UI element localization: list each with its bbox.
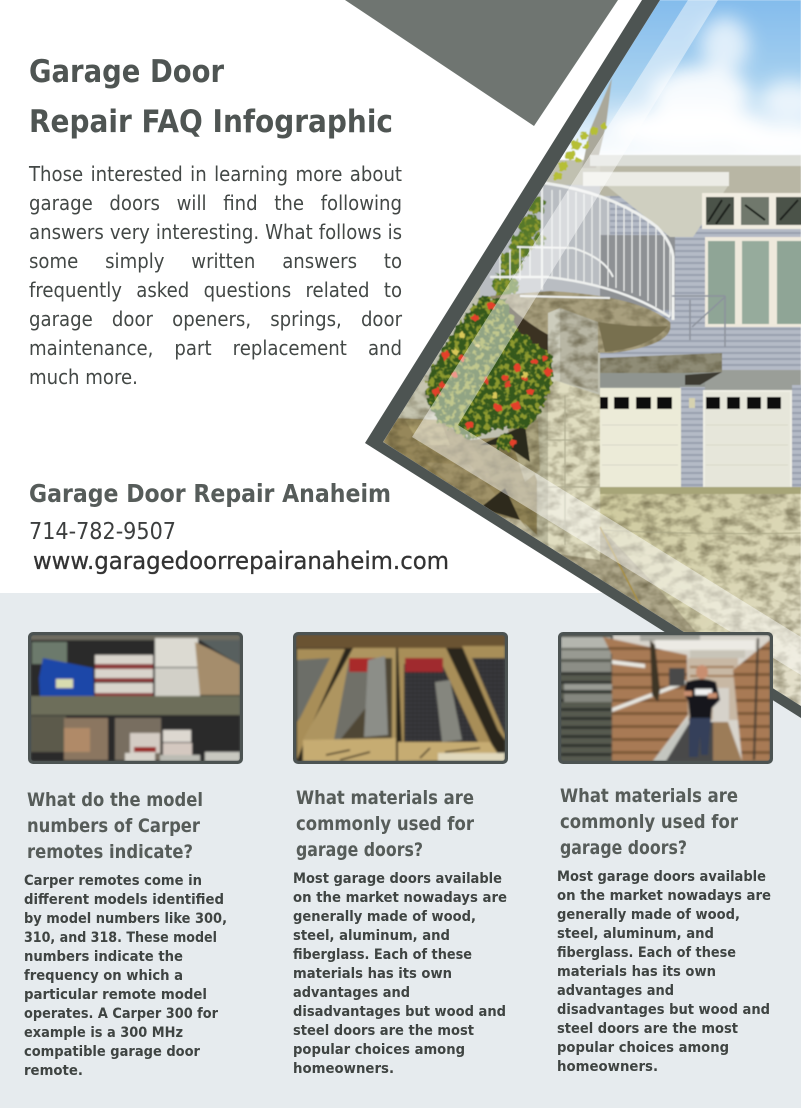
column 1 body: Carper remotes come in [24, 873, 202, 889]
column 2 body: fiberglass. Each of these [293, 947, 472, 963]
column 3 body: advantages and [557, 983, 674, 999]
lintel [600, 353, 722, 375]
bush [426, 298, 553, 451]
intro paragraph: frequently asked questions related to [29, 278, 402, 302]
column 2 heading [296, 788, 475, 861]
foliage upper yellow leaves [553, 123, 607, 180]
column 1 body: numbers indicate the [24, 949, 183, 965]
column 1 body [24, 873, 227, 1079]
column 2 body: homeowners. [293, 1061, 394, 1077]
railing [490, 181, 725, 347]
column 3 body: generally made of wood, [557, 907, 740, 923]
column 3 body: Most garage doors available [557, 869, 766, 885]
column 3 body [557, 869, 771, 1075]
column 3 body: steel doors are the most [557, 1021, 738, 1037]
column [548, 308, 598, 392]
panel: light grey lower background [0, 593, 801, 1108]
column 2 heading: commonly used for [296, 814, 475, 835]
column 1 body: operates. A Carper 300 for [24, 1006, 219, 1022]
column 2 body: popular choices among [293, 1042, 465, 1058]
intro paragraph: much more. [29, 365, 138, 389]
title: Repair FAQ Infographic [29, 104, 393, 140]
column 3 body: on the market nowadays are [557, 888, 771, 904]
foliage behind balcony [492, 196, 546, 298]
column 1 body: by model numbers like 300, [24, 911, 227, 927]
title [29, 54, 393, 140]
column 2 body: Most garage doors available [293, 871, 502, 887]
column 3 text [557, 786, 771, 1075]
column 1 heading: remotes indicate? [27, 842, 193, 863]
column 2 body: steel, aluminum, and [293, 928, 450, 944]
column 2 body: materials has its own [293, 966, 452, 982]
website address: www.garagedoorrepairanaheim.com [33, 547, 449, 575]
image card: man in truck with door panels [558, 632, 773, 764]
title: Garage Door [29, 54, 225, 90]
driveway [600, 487, 801, 720]
grey triangle accent [345, 0, 618, 126]
company name heading: Garage Door Repair Anaheim [29, 479, 391, 508]
phone number: 714-782-9507 [29, 519, 176, 545]
intro paragraph: some simply written answers to [29, 249, 402, 273]
image card: boxes of hinges [293, 632, 508, 764]
translucent white chevron overlay [412, 0, 801, 675]
column 3 heading [560, 786, 739, 859]
column 3 heading: garage doors? [560, 838, 687, 859]
deck of balcony [490, 291, 671, 353]
column 2 body [293, 871, 507, 1077]
intro paragraph: Those interested in learning more about [29, 162, 402, 186]
column 2 heading: garage doors? [296, 840, 423, 861]
column 2 body: advantages and [293, 985, 410, 1001]
intro paragraph: garage door openers, springs, door [29, 307, 402, 331]
man [696, 665, 708, 679]
column 3 body: fiberglass. Each of these [557, 945, 736, 961]
dark frame around photo [365, 0, 801, 718]
column 1 heading: numbers of Carper [27, 816, 201, 837]
column 3 heading: commonly used for [560, 812, 739, 833]
column 2 body: disadvantages but wood and [293, 1004, 506, 1020]
column 1 text [24, 790, 227, 1079]
stained concrete and rocks [383, 374, 696, 632]
photo: house with garage doors [370, 0, 801, 730]
column 1 body: 310, and 318. These model [24, 930, 217, 946]
intro paragraph: maintenance, part replacement and [29, 336, 402, 360]
garage and lintel zone [600, 370, 801, 390]
intro paragraph [28, 162, 402, 389]
column 1 body: frequency on which a [24, 968, 183, 984]
column 3 body: popular choices among [557, 1040, 729, 1056]
column 2 body: on the market nowadays are [293, 890, 507, 906]
column 1 heading [27, 790, 203, 863]
column 1 body: particular remote model [24, 987, 207, 1003]
image card: remote parts on shelves [28, 632, 243, 764]
column 2 text [293, 788, 507, 1077]
column 3 body: materials has its own [557, 964, 716, 980]
column 3 body: disadvantages but wood and [557, 1002, 770, 1018]
column 3 body: homeowners. [557, 1059, 658, 1075]
column 3 heading: What materials are [560, 786, 738, 807]
column 2 body: steel doors are the most [293, 1023, 474, 1039]
column 1 body: different models identified [24, 892, 224, 908]
intro paragraph: answers very interesting. What follows is [29, 220, 402, 244]
column 2 body: generally made of wood, [293, 909, 476, 925]
column 2 heading: What materials are [296, 788, 474, 809]
column 1 body: example is a 300 MHz [24, 1025, 183, 1041]
column 1 heading: What do the model [27, 790, 203, 811]
column 1 body: compatible garage door [24, 1044, 201, 1060]
column 3 body: steel, aluminum, and [557, 926, 714, 942]
column 1 body: remote. [24, 1063, 83, 1079]
intro paragraph: garage doors will find the following [29, 191, 402, 215]
